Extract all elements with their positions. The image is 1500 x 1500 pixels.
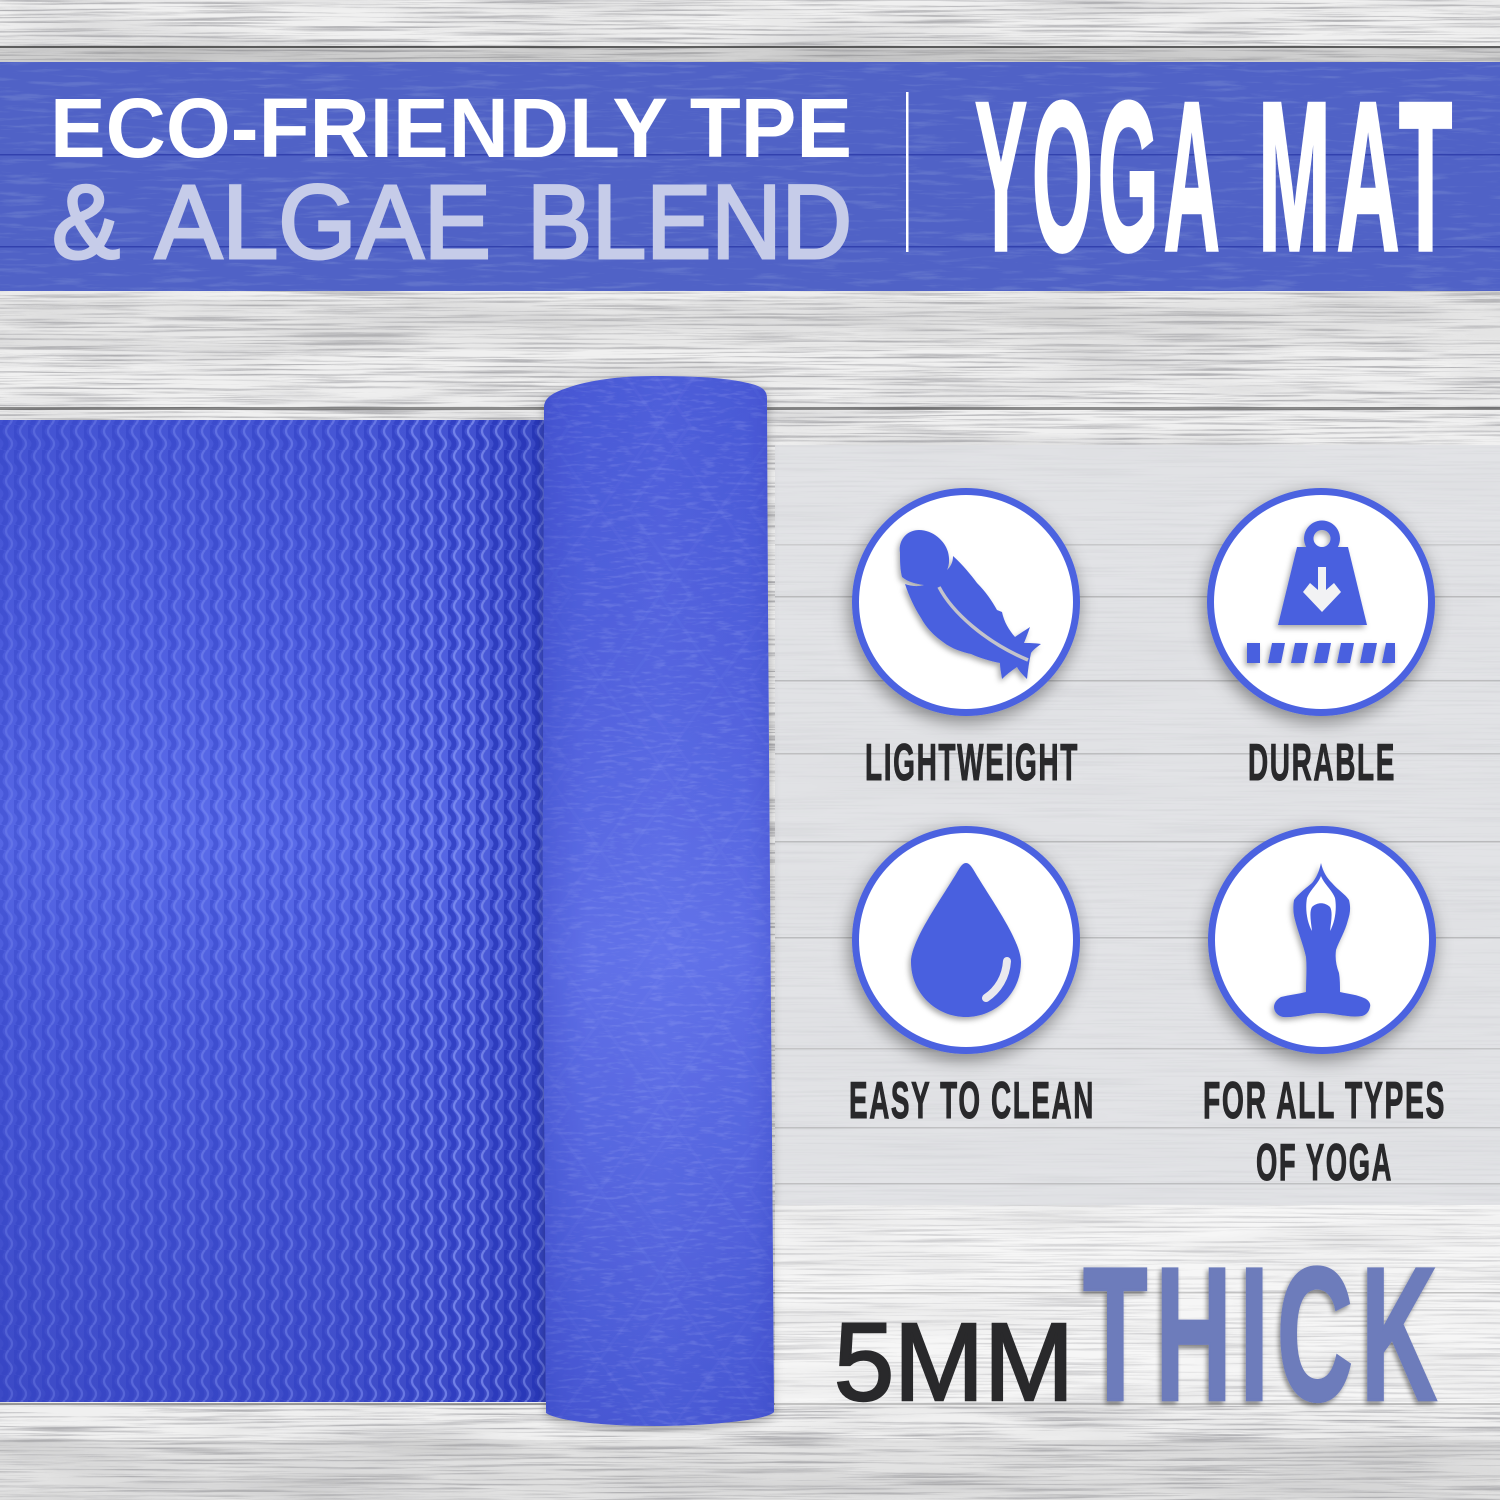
feature: durable [1210, 492, 1432, 792]
label: lightweight: LIGHTWEIGHT [865, 734, 1079, 792]
bright wood strip under callout [775, 1205, 1500, 1405]
label: for all types of yoga [1203, 1072, 1446, 1192]
title line: algae blend: & [52, 164, 120, 281]
feature: easy to clean [849, 830, 1095, 1130]
flat yoga mat [0, 420, 560, 1402]
thickness callout [775, 1205, 1500, 1441]
title line: algae blend: BLEND [527, 164, 852, 281]
label: easy to clean: EASY TO CLEAN [849, 1072, 1095, 1130]
icon: feather [856, 492, 1076, 712]
panel: features backdrop [775, 445, 1500, 1205]
icon: weight over mat [1210, 492, 1432, 712]
title line: algae blend: ALGAE [155, 164, 491, 281]
feature: lightweight [856, 492, 1079, 792]
title line: algae blend [52, 164, 852, 281]
icon: water drop [856, 830, 1076, 1050]
header banner [0, 58, 1500, 296]
rolled yoga mat [540, 370, 780, 1430]
feature: for all types of yoga [1203, 830, 1446, 1192]
icon: meditating figure [1212, 830, 1432, 1050]
5mm label: 5MM [834, 1301, 1074, 1424]
title divider [906, 92, 908, 252]
title line: eco-friendly TPE: ECO-FRIENDLY TPE [50, 81, 852, 175]
